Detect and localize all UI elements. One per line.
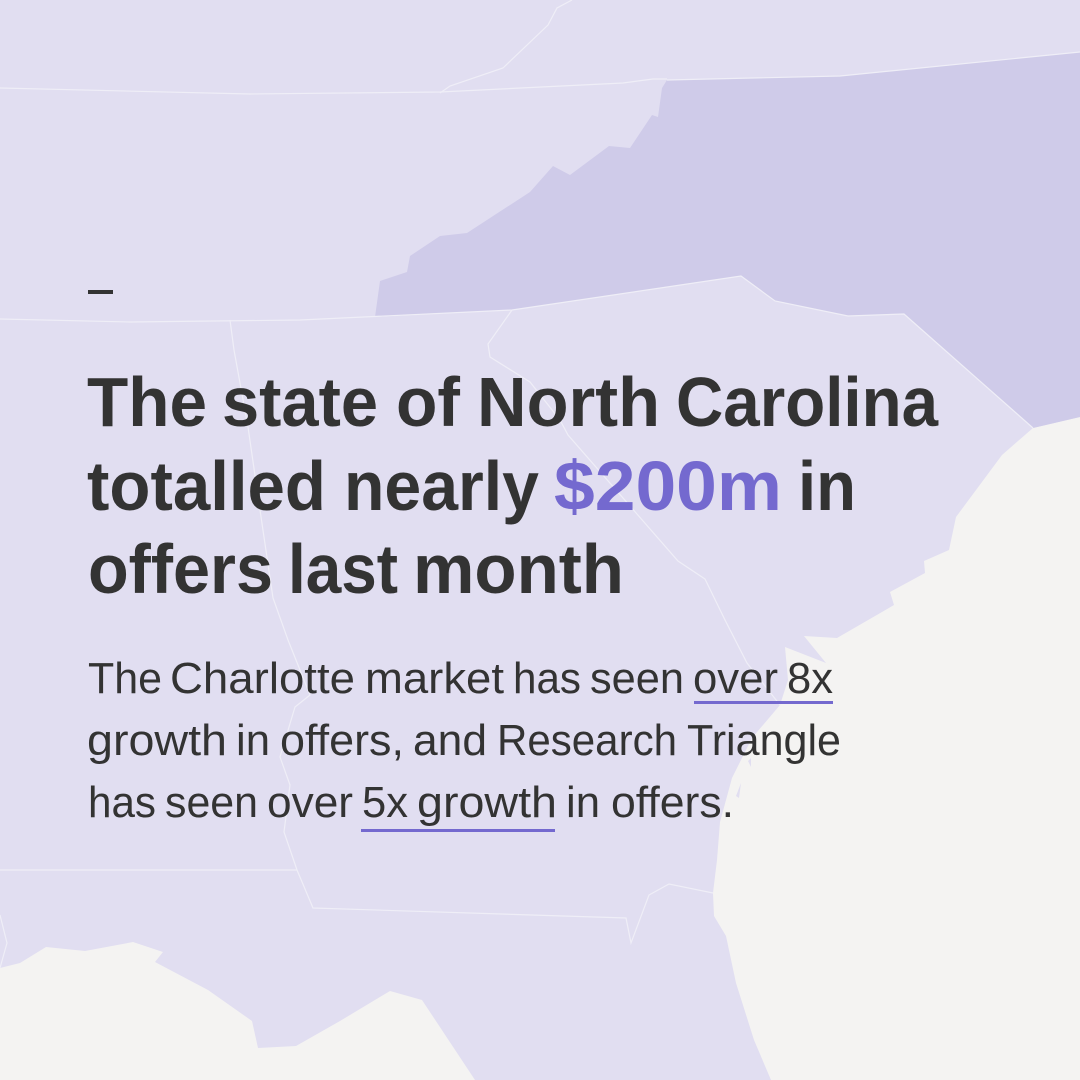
heading: state	[222, 363, 378, 441]
heading: totalled	[87, 447, 326, 525]
heading: offers	[88, 530, 273, 608]
heading: nearly	[344, 447, 539, 525]
highlighted amount: $200m	[554, 447, 782, 525]
heading: month	[413, 530, 624, 608]
body text: 5x	[362, 778, 408, 827]
body text: growth	[87, 716, 227, 765]
heading: The	[87, 363, 207, 441]
body text: offers.	[611, 778, 734, 827]
body text: seen	[590, 654, 684, 703]
body text: 8x	[787, 654, 833, 703]
body text: Triangle	[687, 716, 841, 765]
body text: has	[88, 778, 156, 827]
body text: seen	[165, 778, 258, 827]
dash accent	[88, 290, 113, 294]
body text: in	[236, 716, 270, 765]
heading: last	[288, 530, 398, 608]
body text: Research	[497, 716, 677, 765]
body text: growth	[417, 778, 557, 827]
heading: in	[798, 447, 856, 525]
heading: Carolina	[676, 363, 939, 441]
heading: of	[396, 363, 461, 441]
body text: Charlotte	[170, 654, 355, 703]
body text: over	[693, 654, 778, 703]
body text: and	[413, 716, 487, 765]
heading	[87, 363, 939, 608]
underline: over 8x	[694, 701, 833, 704]
body text: The	[88, 654, 162, 703]
body text: over	[267, 778, 353, 827]
body text: market	[365, 654, 504, 703]
body text: in	[566, 778, 600, 827]
body text: has	[513, 654, 581, 703]
heading: North	[477, 363, 660, 441]
body text: offers,	[280, 716, 404, 765]
map: North Carolina highlighted	[375, 52, 1080, 428]
body text	[87, 654, 841, 827]
underline: 5x growth	[361, 829, 555, 832]
